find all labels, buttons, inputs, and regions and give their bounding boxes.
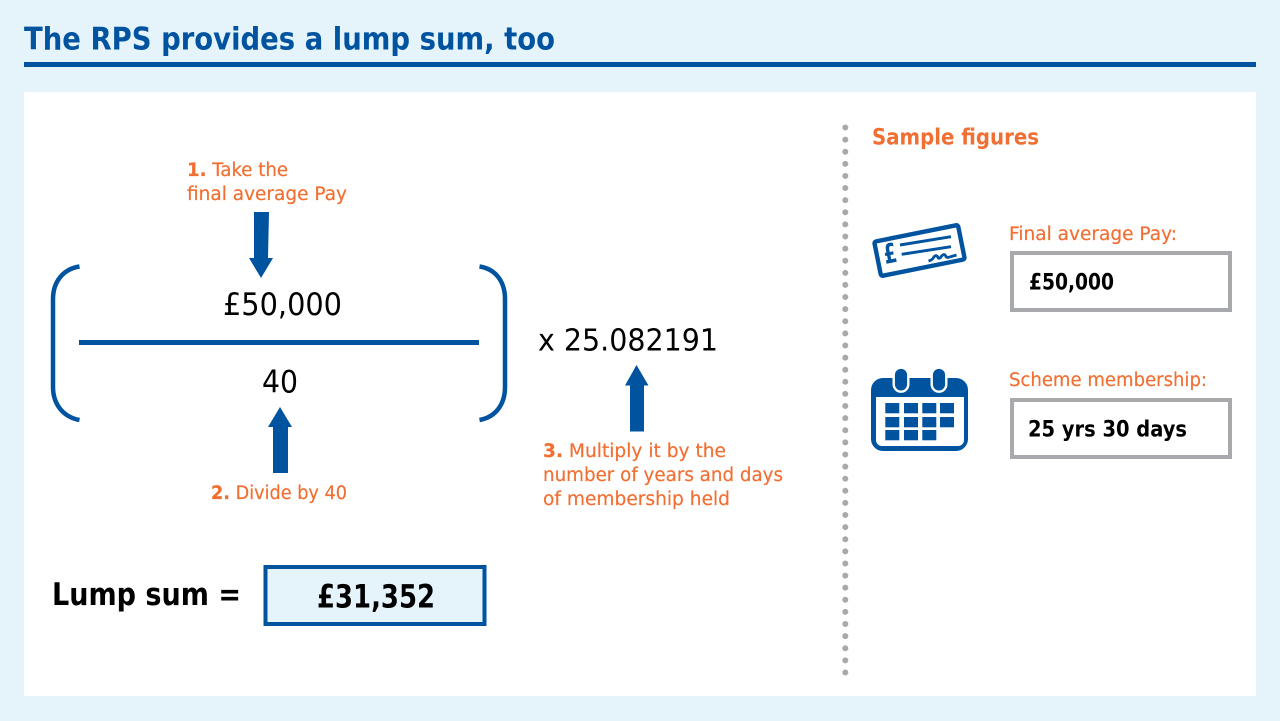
scheme membership label: Scheme membership: (1009, 370, 1207, 391)
arrow: step 2 up (268, 407, 292, 473)
step 1 label: final average Pay (187, 184, 347, 205)
step 3 label: 3. Multiply it by the (543, 441, 726, 462)
arrow: step 1 down (249, 212, 273, 278)
step 2 label: 2. Divide by 40 (211, 483, 347, 504)
title rule (24, 62, 1256, 67)
icon: cheque (874, 225, 965, 276)
fraction line (79, 340, 479, 345)
scheme membership box: 25 yrs 30 days (1028, 416, 1187, 442)
denominator: 40 (262, 365, 298, 401)
sample figures section (871, 126, 1230, 457)
formula section (52, 160, 783, 624)
step 3 label (543, 441, 783, 510)
final average pay box (1012, 253, 1230, 310)
sample figures heading: Sample figures (872, 126, 1039, 150)
step 1 label: 1. Take the (187, 160, 288, 181)
multiplier: x 25.082191 (538, 324, 718, 359)
lump sum result box (266, 567, 484, 624)
left bracket (53, 266, 80, 420)
final average pay label: Final average Pay: (1009, 224, 1177, 245)
title: The RPS provides a lump sum, too (24, 22, 555, 58)
lump sum label: Lump sum = (52, 577, 241, 613)
lump sum result box: £31,352 (317, 578, 435, 616)
step 3 label: of membership held (543, 489, 730, 510)
right bracket (480, 266, 505, 420)
step 3 label: number of years and days (543, 465, 783, 486)
dotted divider (842, 128, 848, 673)
arrow: step 3 up (625, 365, 648, 432)
numerator: £50,000 (223, 287, 342, 323)
icon: calendar (871, 368, 968, 451)
final average pay box: £50,000 (1029, 270, 1114, 296)
step 1 label (187, 160, 347, 205)
icon: cheque: £ (881, 238, 900, 271)
scheme membership box (1012, 400, 1230, 457)
